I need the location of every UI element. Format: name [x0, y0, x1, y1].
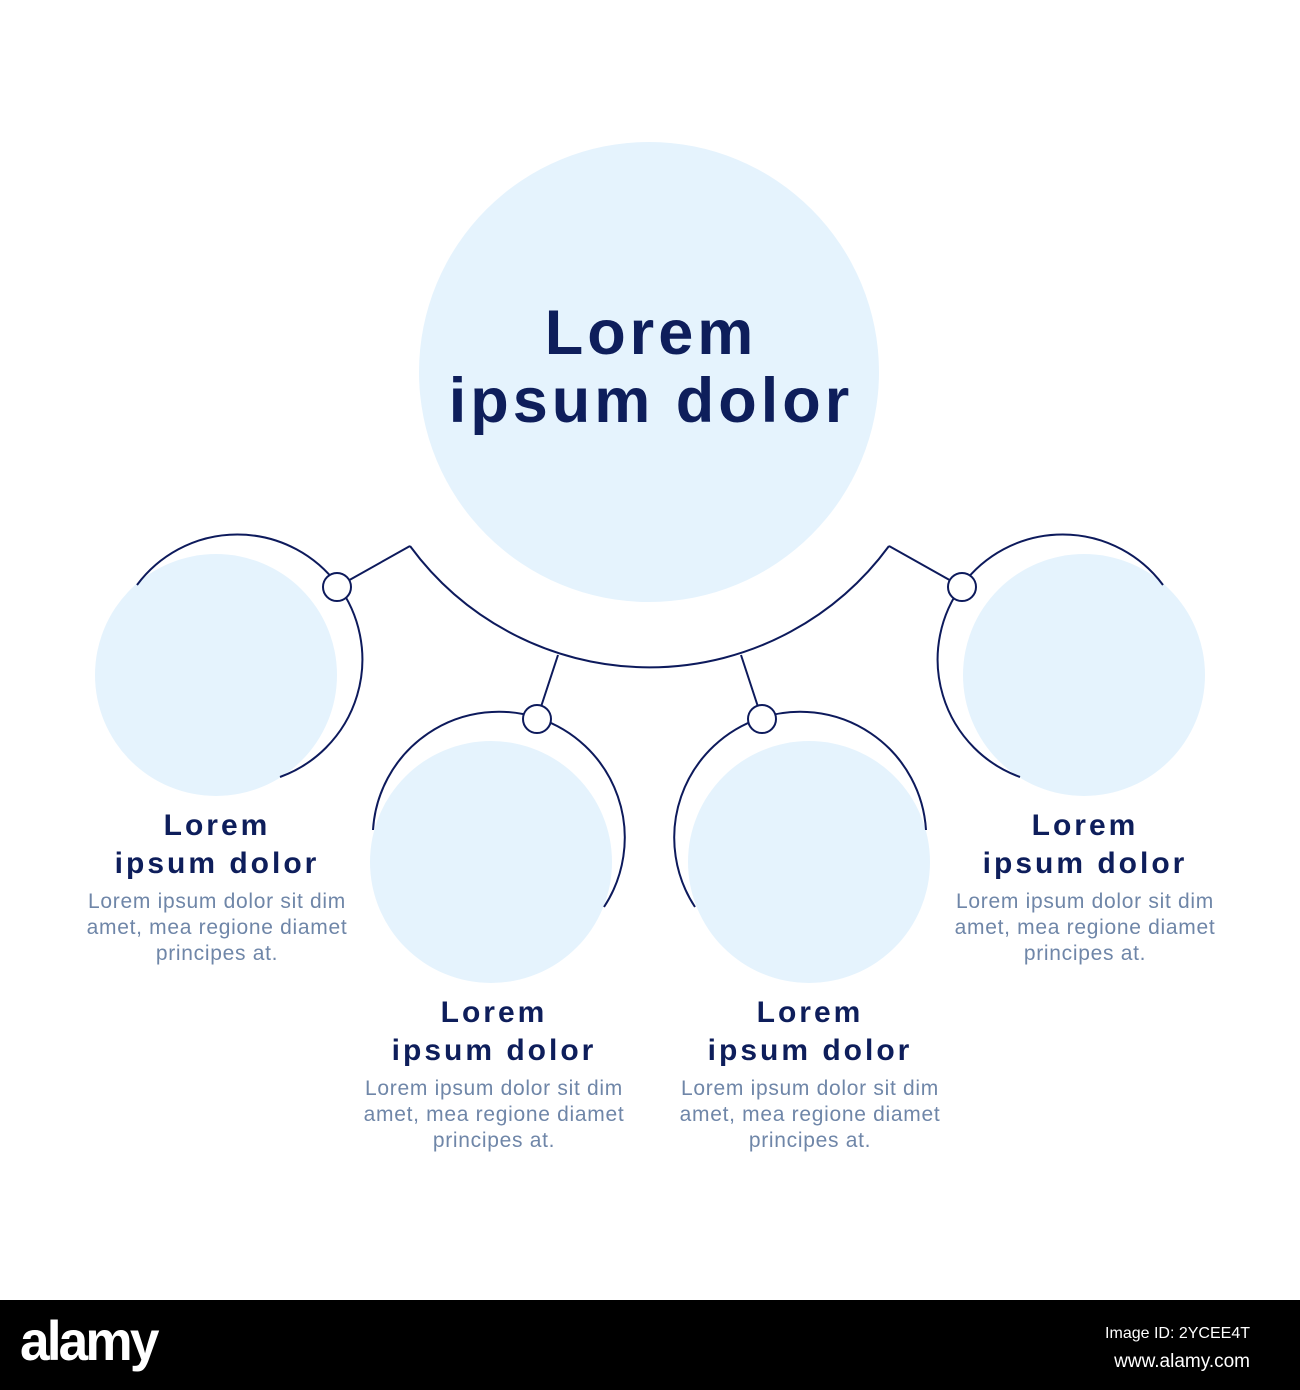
text block left: amet, mea regione diamet [87, 916, 347, 939]
text block lower left: principes at. [433, 1129, 555, 1152]
text block lower left [364, 996, 624, 1152]
node lower left [370, 655, 625, 983]
text block lower right: Lorem ipsum dolor sit dim [681, 1077, 939, 1100]
text block right: ipsum dolor [983, 847, 1187, 880]
node right [889, 534, 1205, 796]
text block left: Lorem ipsum dolor sit dim [88, 890, 346, 913]
text block lower left: Lorem ipsum dolor sit dim [365, 1077, 623, 1100]
text block lower right [680, 996, 940, 1152]
text block lower right: ipsum dolor [708, 1034, 912, 1067]
image id: www.alamy.com [1114, 1351, 1250, 1372]
text block lower left: ipsum dolor [392, 1034, 596, 1067]
text block right: Lorem ipsum dolor sit dim [956, 890, 1214, 913]
text block right: Lorem [1032, 809, 1138, 842]
footer bar [0, 1300, 1300, 1390]
text block left: Lorem [164, 809, 270, 842]
image id [1105, 1325, 1250, 1372]
logo: alamy [20, 1309, 157, 1372]
text block lower right: principes at. [749, 1129, 871, 1152]
main circle [419, 142, 879, 602]
text block lower left: Lorem [441, 996, 547, 1029]
text block left: principes at. [156, 942, 278, 965]
connector arc [410, 546, 889, 667]
main title: ipsum dolor [449, 366, 853, 436]
main title [449, 298, 853, 436]
text block right [955, 809, 1215, 965]
text block right: principes at. [1024, 942, 1146, 965]
text block lower left: amet, mea regione diamet [364, 1103, 624, 1126]
text block left: ipsum dolor [115, 847, 319, 880]
text block lower right: Lorem [757, 996, 863, 1029]
main title: Lorem [545, 298, 757, 368]
text block left [87, 809, 347, 965]
text block right: amet, mea regione diamet [955, 916, 1215, 939]
text block lower right: amet, mea regione diamet [680, 1103, 940, 1126]
node left [95, 534, 410, 796]
node lower right [674, 655, 930, 983]
image id: Image ID: 2YCEE4T [1105, 1325, 1250, 1342]
